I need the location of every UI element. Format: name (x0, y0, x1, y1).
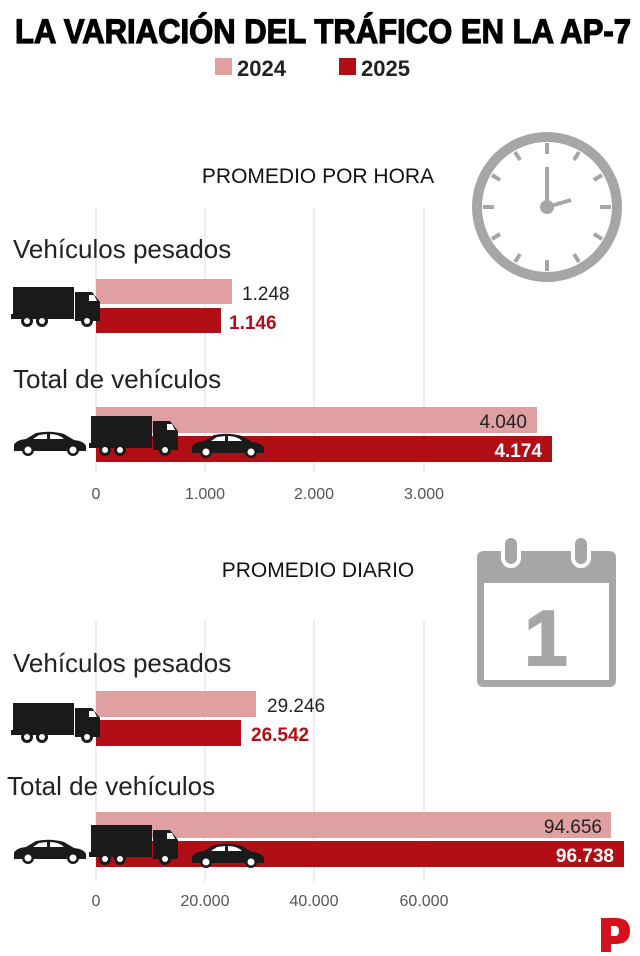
axis bottom (92, 893, 449, 910)
gridlines top (96, 208, 424, 472)
icon: truck diario (11, 703, 100, 743)
bars: total hora: 4.040 (479, 412, 527, 433)
icon: clock (477, 137, 617, 277)
legend: 2025 (361, 56, 410, 81)
bars: total hora (96, 407, 552, 462)
bars: pesados hora (96, 279, 290, 334)
legend: 2024 (237, 56, 287, 81)
bars: total diario (96, 812, 624, 867)
axis top (92, 486, 444, 503)
axis top: 0 (92, 486, 101, 503)
heading: promedio por hora: PROMEDIO POR HORA (202, 165, 434, 188)
label: pesados diario: Vehículos pesados (13, 648, 231, 678)
bars: pesados diario: 26.542 (251, 725, 309, 746)
bars: total diario: 94.656 (544, 817, 602, 838)
bars: pesados diario: 29.246 (267, 696, 325, 717)
label: vehiculos pesados hora: Vehículos pesados (13, 234, 231, 264)
gridlines bottom (96, 620, 424, 882)
axis top: 1.000 (185, 486, 225, 503)
icon: calendar (477, 536, 616, 687)
icons: vehicles diario (14, 825, 264, 868)
axis bottom: 60.000 (400, 893, 449, 910)
axis bottom: 20.000 (181, 893, 230, 910)
legend (215, 56, 410, 81)
icon: calendar: 1 (524, 594, 568, 682)
axis top: 2.000 (294, 486, 334, 503)
bars: total diario: 96.738 (556, 846, 614, 867)
logo (601, 918, 630, 952)
axis top: 3.000 (404, 486, 444, 503)
label: total diario: Total de vehículos (7, 771, 215, 801)
heading: promedio diario: PROMEDIO DIARIO (222, 559, 414, 582)
bars: pesados hora: 1.248 (242, 284, 290, 305)
icon: truck (11, 287, 100, 327)
label: total hora: Total de vehículos (13, 364, 221, 394)
bars: total hora: 4.174 (494, 441, 542, 462)
axis bottom: 40.000 (290, 893, 339, 910)
bars: pesados hora: 1.146 (229, 313, 277, 334)
axis bottom: 0 (92, 893, 101, 910)
icons: vehicles hora (14, 416, 264, 458)
bars: pesados diario (96, 691, 325, 746)
